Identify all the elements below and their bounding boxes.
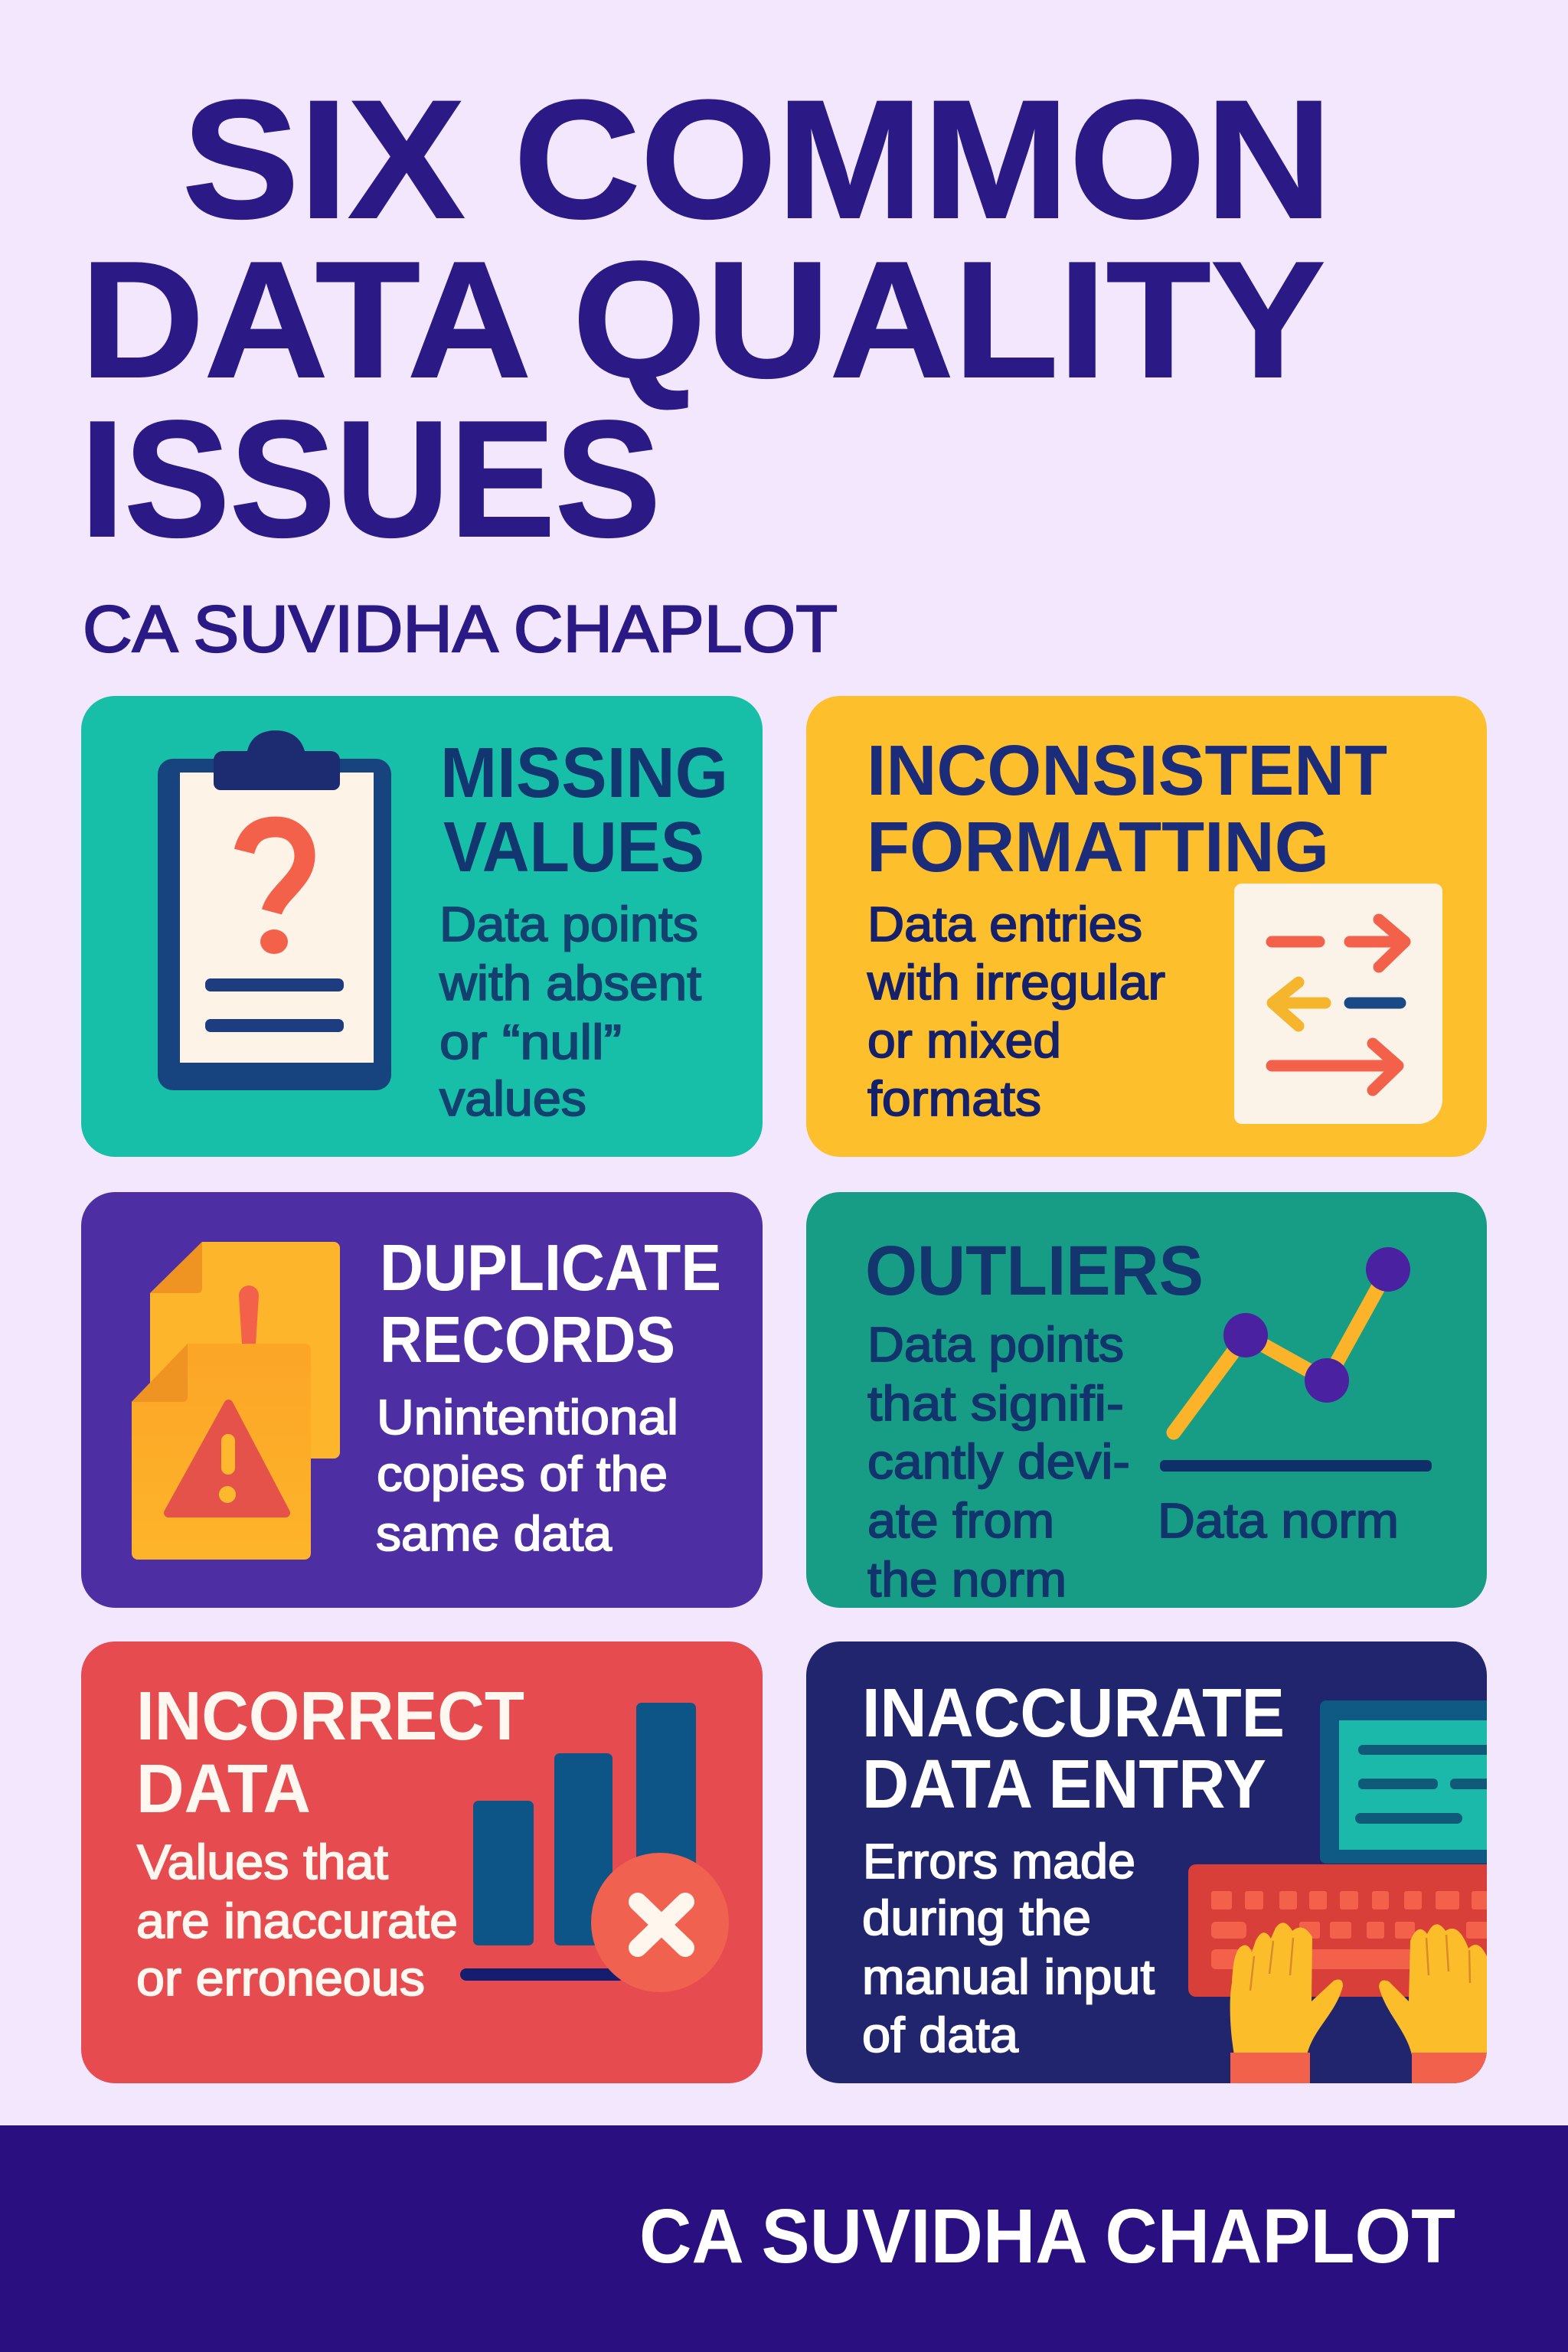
description: outliers: cantly devi-: [867, 1434, 1130, 1489]
heading: incorrect data: INCORRECT: [136, 1678, 524, 1755]
icon: duplicate documents with warning: [132, 1242, 340, 1560]
heading: duplicate records: RECORDS: [380, 1304, 675, 1377]
description: incorrect data: Values that: [137, 1834, 388, 1890]
description: outliers: ate from: [867, 1493, 1054, 1548]
panel: incorrect data: [81, 1642, 763, 2083]
line chart with outlier points: [1174, 1247, 1410, 1432]
heading: incorrect data: DATA: [136, 1751, 311, 1828]
description: duplicate records: [376, 1390, 678, 1561]
description: incorrect data: or erroneous: [136, 1951, 425, 2006]
heading: inconsistent formatting: [867, 730, 1387, 887]
panel: outliers: [806, 1192, 1487, 1608]
description: inconsistent formatting: with irregular: [867, 955, 1165, 1010]
heading: inconsistent formatting: FORMATTING: [867, 807, 1329, 887]
description: inaccurate data entry: Errors made: [863, 1834, 1135, 1889]
heading: incorrect data: [136, 1678, 524, 1828]
heading: inaccurate data entry: [862, 1675, 1285, 1823]
heading: outliers: OUTLIERS: [865, 1232, 1204, 1310]
heading: inaccurate data entry: INACCURATE: [862, 1675, 1285, 1752]
heading: inaccurate data entry: DATA ENTRY: [862, 1746, 1266, 1823]
heading: duplicate records: DUPLICATE: [380, 1232, 721, 1305]
panel: inconsistent formatting: [806, 696, 1487, 1157]
heading: missing values: VALUES: [443, 807, 704, 887]
description: outliers: the norm: [867, 1552, 1067, 1607]
title: SIX COMMON: [182, 65, 1332, 253]
footer author name: CA SUVIDHA CHAPLOT: [639, 2194, 1455, 2279]
description: incorrect data: are inaccurate: [136, 1893, 458, 1949]
norm line: [1160, 1460, 1432, 1472]
panel: duplicate records: [81, 1192, 763, 1608]
description: missing values: [439, 897, 701, 1126]
description: inconsistent formatting: or mixed: [867, 1013, 1061, 1068]
icon: mixed format arrows: [1234, 884, 1442, 1124]
description: duplicate records: same data: [376, 1506, 612, 1561]
footer band: [0, 2125, 1568, 2352]
icon: monitor, keyboard and typing hands: [1188, 1700, 1487, 2083]
title: ISSUES: [80, 386, 661, 571]
panel: missing values: [81, 696, 763, 1157]
description: missing values: values: [439, 1071, 586, 1126]
subtitle: author: CA SUVIDHA CHAPLOT: [83, 593, 838, 666]
description: inaccurate data entry: during the: [862, 1890, 1091, 1945]
heading: missing values: [440, 733, 728, 887]
description: missing values: with absent: [439, 956, 701, 1011]
description: outliers: [867, 1317, 1130, 1607]
description: missing values: or “null”: [439, 1014, 622, 1070]
description: outliers: that signifi-: [867, 1376, 1124, 1431]
description: duplicate records: copies of the: [377, 1446, 668, 1501]
label: data norm: Data norm: [1158, 1493, 1399, 1548]
description: inconsistent formatting: Data entries: [867, 897, 1142, 952]
title: [80, 65, 1332, 571]
description: inaccurate data entry: manual input: [862, 1949, 1155, 2004]
description: inaccurate data entry: of data: [862, 2007, 1018, 2063]
description: incorrect data: [136, 1834, 458, 2006]
panel: inaccurate data entry: [806, 1642, 1523, 2086]
heading: duplicate records: [380, 1232, 721, 1377]
description: missing values: Data points: [439, 897, 698, 952]
description: outliers: Data points: [867, 1317, 1124, 1372]
description: inaccurate data entry: [862, 1834, 1155, 2063]
heading: missing values: MISSING: [440, 733, 728, 812]
description: inconsistent formatting: formats: [867, 1071, 1041, 1126]
icon: clipboard with question mark: [158, 730, 391, 1090]
heading: inconsistent formatting: INCONSISTENT: [867, 730, 1387, 810]
description: duplicate records: Unintentional: [377, 1390, 678, 1445]
icon: bar chart with error mark: [460, 1703, 729, 1992]
description: inconsistent formatting: [867, 897, 1165, 1126]
title: DATA QUALITY: [80, 227, 1325, 412]
